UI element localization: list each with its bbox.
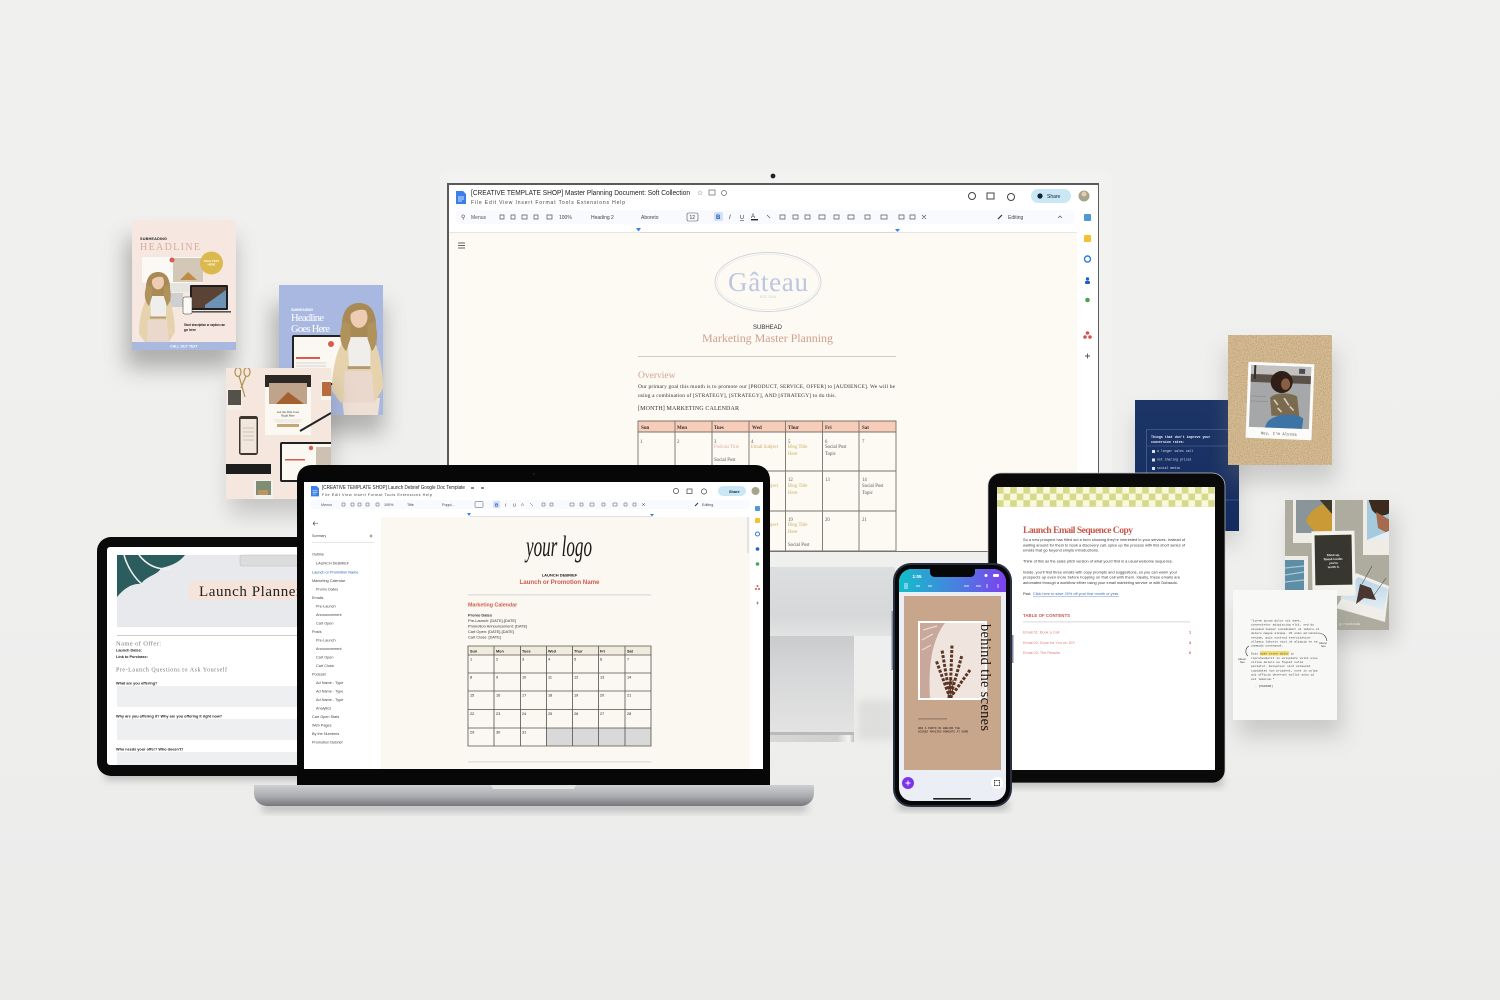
marketing calendar table: 12 <box>788 478 793 483</box>
docs toolbar: 100% <box>559 215 572 221</box>
monitor frame <box>440 172 1112 567</box>
logo: your logo: your logo <box>524 530 592 563</box>
marketing calendar table: Social Post <box>862 484 884 489</box>
outline icon <box>458 243 465 248</box>
outline sidebar: Pre-Launch <box>316 604 336 608</box>
left tablet: launch planner <box>97 537 317 780</box>
testimonial paper card: consectetur adipiscing elit, sed do <box>1251 623 1314 627</box>
email card: Right Here <box>281 414 295 418</box>
table of contents: Email 02: Done for You vs. DIY <box>1023 641 1076 645</box>
ruler <box>226 464 271 474</box>
table of contents: TABLE OF CONTENTS <box>1023 613 1070 618</box>
marketing calendar table: Wed <box>752 426 762 431</box>
docs toolbar: 12 <box>690 215 695 221</box>
docs toolbar: U <box>513 502 516 508</box>
planner questions: Why are you offering it? Why are you offering it right now? <box>116 714 223 718</box>
docs toolbar: I <box>729 215 731 221</box>
docs toolbar: A <box>521 502 524 507</box>
calendar table: 18 <box>548 694 552 698</box>
outline sidebar: Web Pages <box>312 724 332 728</box>
overview text: [MONTH] MARKETING CALENDAR <box>638 406 739 412</box>
outline sidebar: Announcement <box>316 613 342 617</box>
navy card: conversion rates: social media <box>1157 466 1180 470</box>
calendar table: 21 <box>627 694 631 698</box>
calendar table: 8 <box>470 676 472 680</box>
testimonial paper card: dolore magna aliqua. Ut enim ad minim <box>1251 631 1318 635</box>
marketing calendar table: 19 <box>788 518 793 523</box>
canvas design: behind the scenes <box>904 596 1001 770</box>
testimonial paper card: - [PERSON] <box>1255 684 1273 688</box>
ruler <box>449 228 1077 233</box>
calendar table: Fri <box>600 650 605 654</box>
logo: Gateau: Gâteau <box>728 267 808 297</box>
marketing calendar table: Sun <box>641 426 650 431</box>
outline sidebar: Ad Name - Type <box>316 698 343 702</box>
logo: Gateau <box>715 252 821 312</box>
docs toolbar: ⚲ <box>461 214 465 221</box>
outline sidebar: Announcement <box>316 647 342 651</box>
hand-drawn notes <box>1238 633 1327 664</box>
calendar table: 29 <box>470 730 474 734</box>
testimonial paper card: pariatur. Excepteur sint occaecat <box>1251 664 1311 668</box>
marketing calendar table: Topic <box>825 452 836 457</box>
calendar table: Tues <box>522 650 531 654</box>
marketing calendar table: Here <box>788 491 797 496</box>
email intro copy: emails that go beyond simple introductions. <box>1023 548 1099 552</box>
calendar table: 28 <box>627 712 631 716</box>
calendar table: 4 <box>548 658 550 662</box>
document heading <box>638 325 896 357</box>
laptop screen: launch debrief <box>304 482 763 769</box>
checker banner <box>997 487 1215 507</box>
docs toolbar: Title <box>407 503 414 507</box>
marketing calendar dates <box>468 602 527 639</box>
laptop shadow <box>262 802 807 812</box>
outline sidebar: Cart Open <box>316 622 334 626</box>
calendar table: 24 <box>522 712 526 716</box>
outline sidebar: Promo Dates <box>316 588 338 592</box>
outline sidebar: Posts <box>312 630 322 634</box>
email intro copy: Think of this as the sales pitch version of what you'd find in a usual welcome sequence. <box>1023 559 1173 563</box>
testimonial paper card: veniam, quis nostrud exercitation <box>1251 635 1311 639</box>
photo: arms up <box>1363 500 1389 555</box>
docs toolbar: U <box>740 215 744 221</box>
document heading: Marketing Master Planning <box>702 331 833 345</box>
overview text: Our primary goal this month is to promote our [PRODUCT, SERVICE, OFFER] to [AUDIENCE]. We will be <box>638 384 896 390</box>
navy card: conversion rates: conversion rates: <box>1151 440 1185 444</box>
planner questions: Name of Offer: <box>116 640 161 648</box>
app header bar: 1:05 <box>912 574 922 579</box>
add button <box>902 777 914 789</box>
email card: Get the Title Goes <box>277 410 300 414</box>
docs toolbar: B <box>716 215 721 221</box>
marketing calendar table: Email Subject <box>751 445 779 450</box>
planner questions: Launch Dates: <box>116 648 142 652</box>
hand-drawn notes: call-out <box>1238 658 1246 661</box>
testimonial paper card: cupidatat non proident, sunt in culpa <box>1251 668 1318 672</box>
marketing calendar table: 3 <box>714 440 717 445</box>
calendar table <box>468 646 651 762</box>
photo: sea <box>1285 556 1308 590</box>
calendar table: 27 <box>600 712 604 716</box>
scissors <box>235 368 250 397</box>
ruler <box>467 513 654 517</box>
marketing calendar dates: Pre-Launch: [DATE]-[DATE] <box>468 618 516 623</box>
phone <box>239 416 258 455</box>
docs toolbar: Editing <box>702 503 713 507</box>
outline sidebar: Podcast <box>312 672 327 676</box>
flyer: headline goes here: Goes Here <box>291 324 330 335</box>
document heading <box>468 572 651 595</box>
marketing calendar table: Here <box>788 452 797 457</box>
table of contents: 3 <box>1189 641 1191 645</box>
email intro copy: prospects up even more before hopping on that call with them. Ideally, these emails are <box>1023 576 1180 580</box>
marketing calendar table: 7 <box>862 440 865 445</box>
side panel icons <box>1083 214 1092 358</box>
sale seal <box>200 252 223 274</box>
outline sidebar: Outline <box>312 552 324 556</box>
canvas design: behind the scenes: HOW A PHOTO OF BEHIND THE <box>918 727 960 730</box>
marketing calendar table: Fri <box>825 426 832 431</box>
calendar table: 23 <box>496 712 500 716</box>
outline sidebar: Summary <box>312 534 326 538</box>
marketing calendar table: Podcast Title <box>714 445 739 450</box>
calendar table: 6 <box>600 658 602 662</box>
monitor stand <box>770 567 895 742</box>
calendar table: 25 <box>548 712 552 716</box>
docs toolbar: Menus <box>471 215 487 221</box>
email card <box>265 375 311 435</box>
monitor screen: master planning document <box>449 185 1098 551</box>
calendar table: 19 <box>574 694 578 698</box>
outline sidebar: Pre-Launch <box>316 638 336 642</box>
overview text: using a combination of [STRATEGY], [STRATEGY], AND [STRATEGY] to do this. <box>638 392 836 399</box>
photo: cactus <box>1293 496 1335 543</box>
polaroid: quote: worth it. <box>1327 565 1340 569</box>
marketing calendar dates: Promo Dates <box>468 612 492 618</box>
calendar table: 9 <box>496 676 498 680</box>
marketing calendar table: 1 <box>640 440 643 445</box>
calendar table: 2 <box>496 658 498 662</box>
marketing calendar table: Sat <box>862 426 869 431</box>
marketing calendar table: Mon <box>677 426 687 431</box>
marketing calendar table: Social Post <box>788 543 810 548</box>
polaroid: quote: Show up. <box>1327 553 1340 557</box>
marketing calendar table: Email Subject <box>751 523 779 528</box>
docs title bar: Share <box>729 490 740 494</box>
flyer: subheading headline: HEADLINE <box>140 242 200 253</box>
docs title bar: [CREATIVE TEMPLATE SHOP] Master Planning Document: Soft Collection <box>471 190 690 197</box>
planner header: Launch Planner <box>199 584 301 600</box>
outline sidebar: Marketing Calendar <box>312 579 346 583</box>
home bar <box>933 798 971 800</box>
document heading: SUBHEAD <box>753 325 783 331</box>
docs title bar: ☆ <box>697 189 703 197</box>
navy card: conversion rates: not sharing prices <box>1157 458 1192 462</box>
overview text <box>638 371 896 412</box>
canvas design: behind the scenes: SCENES AMAZING MOMENTS AT HOME <box>918 730 969 734</box>
marketing calendar table <box>638 421 896 551</box>
docs title bar <box>456 189 1090 206</box>
docs title bar: [CREATIVE TEMPLATE SHOP] Launch Debrief Google Doc Template <box>322 485 465 491</box>
sale seal: SALE TEXT <box>204 259 219 263</box>
email intro copy <box>1023 538 1186 596</box>
testimonial paper card: qui officia deserunt mollit anim id <box>1251 673 1314 677</box>
right tablet: email sequence <box>988 473 1225 787</box>
docs toolbar: Menus <box>321 503 332 507</box>
testimonial paper card: reprehenderit in voluptate velit esse <box>1251 656 1318 660</box>
grid button <box>991 777 1003 789</box>
cork board card with polaroid <box>1226 335 1336 482</box>
email intro copy: automated through a workflow either using your email marketing service or with Dubsado. <box>1023 581 1178 585</box>
sale seal: HERE <box>208 262 216 266</box>
polaroid: quote: Speak louder. <box>1324 557 1343 561</box>
docs toolbar <box>462 212 1062 222</box>
calendar table: 22 <box>470 712 474 716</box>
docs title bar <box>311 485 760 497</box>
polaroid: quote <box>1311 531 1356 596</box>
calendar table: Sun <box>470 650 478 654</box>
testimonial paper card: ullamco laboris nisi ut aliquip ex ea <box>1251 640 1318 644</box>
marketing calendar table: 6 <box>825 440 828 445</box>
email intro copy: waiting around for them to book a discovery call, spice up the process with this short series of <box>1023 543 1186 547</box>
calendar table: 5 <box>574 658 576 662</box>
calendar table: 31 <box>522 730 526 734</box>
marketing calendar table: 13 <box>825 478 830 483</box>
outline sidebar: Launch or Promotion Name <box>312 570 358 574</box>
calendar table: 3 <box>522 658 524 662</box>
testimonial paper card: eiusmod tempor incididunt ut labore et <box>1251 627 1320 631</box>
planner questions: What are you offering? <box>116 682 158 686</box>
marketing calendar table: 4 <box>751 440 754 445</box>
outline sidebar: Ad Name - Type <box>316 690 343 694</box>
calendar table: 15 <box>470 694 474 698</box>
calendar table: 14 <box>627 676 631 680</box>
testimonial paper card: est laborum." <box>1251 677 1275 681</box>
outline sidebar: Cart Close <box>316 664 334 668</box>
outline sidebar: Cart Open <box>316 656 334 660</box>
navy card: conversion rates: a longer sales call <box>1157 449 1193 453</box>
navy card: conversion rates: Things that don't improve your <box>1151 435 1210 439</box>
table of contents <box>1023 613 1191 655</box>
docs toolbar: 100% <box>384 503 394 507</box>
marketing calendar dates: Marketing Calendar <box>468 602 517 608</box>
planner questions <box>116 640 300 766</box>
flyer: subheading headline: CALL OUT TEXT <box>170 344 199 348</box>
calendar table: 16 <box>496 694 500 698</box>
docs title bar: File Edit View Insert Format Tools Extensions Help <box>322 493 432 497</box>
photo: woman <box>139 272 175 342</box>
docs toolbar: Poppi... <box>442 503 455 507</box>
calendar table: 10 <box>522 676 526 680</box>
docs title bar: Share <box>1047 194 1061 200</box>
docs toolbar: I <box>505 502 507 508</box>
docs toolbar: Heading 2 <box>591 215 614 221</box>
logo: Gateau: EST. 2019 <box>760 295 776 299</box>
testimonial paper card: cillum dolore eu fugiat nulla <box>1251 660 1303 664</box>
hand-drawn notes: call-out <box>1319 642 1327 645</box>
marketing calendar table: Here <box>788 530 797 535</box>
testimonial paper card: Duis aute irure dolor in <box>1251 652 1294 656</box>
marketing calendar table: Blog Title <box>788 484 807 489</box>
marketing calendar table: Blog Title <box>788 445 807 450</box>
tablet <box>280 442 331 482</box>
calendar table: 1 <box>470 658 472 662</box>
app header bar <box>899 569 1006 592</box>
flyer: subheading headline <box>126 220 236 368</box>
marketing calendar table: Email Subject <box>751 484 779 489</box>
canvas design: behind the scenes: behind the scenes <box>977 624 993 731</box>
laptop lid <box>297 465 770 785</box>
flyer: subheading headline: SUBHEADING <box>140 237 167 241</box>
marketing calendar table: Thur <box>788 426 800 431</box>
docs toolbar: B <box>495 502 499 508</box>
hand-drawn notes: here <box>1240 661 1245 664</box>
photo clipping <box>227 389 242 410</box>
table of contents: 1 <box>1189 630 1191 634</box>
marketing calendar table: Tues <box>714 426 724 431</box>
flyer: headline goes here <box>272 285 384 434</box>
docs toolbar: Aboreto <box>641 215 659 221</box>
moodboard card: @ YOURNAME <box>1339 622 1360 626</box>
pen <box>300 413 331 431</box>
smartphone <box>892 563 1014 810</box>
desktop monitor <box>440 172 1112 742</box>
calendar table: 7 <box>627 658 629 662</box>
calendar table: 20 <box>600 694 604 698</box>
photo: woman <box>332 303 383 415</box>
flyer: subheading headline: go here <box>184 328 196 332</box>
docs toolbar: Editing <box>1008 215 1024 221</box>
mockup collage <box>142 257 231 314</box>
testimonial paper card: commodo consequat. <box>1251 644 1284 648</box>
hand-drawn notes: here <box>1321 645 1326 648</box>
laptop mockup <box>292 335 342 385</box>
outline sidebar <box>312 522 374 744</box>
overview text: Overview <box>638 371 676 381</box>
outline sidebar: Promotion Debrief <box>312 740 344 744</box>
photo: dried flowers <box>920 623 985 698</box>
marketing calendar table: Social Post <box>714 458 736 463</box>
email intro copy: Click here to save 20% off your first month or year. <box>1033 592 1119 596</box>
side panel icons <box>747 506 760 604</box>
marketing calendar dates: Promotion Announcement: [DATE] <box>468 624 527 628</box>
flyer: flat lay <box>226 368 340 514</box>
marketing calendar table: 14 <box>862 478 867 483</box>
docs title bar: File Edit View Insert Format Tools Extensions Help <box>471 200 625 206</box>
docs toolbar: A <box>751 214 755 220</box>
planner questions: Link to Purchase: <box>116 655 148 659</box>
outline sidebar: Analytics <box>316 706 331 710</box>
calendar table: 11 <box>548 676 552 680</box>
laptop base <box>254 785 814 806</box>
marketing calendar dates: Cart Close: [DATE] <box>468 634 501 639</box>
testimonial paper card <box>1233 590 1342 736</box>
email intro copy: So a new prospect has filled out a form showing they're interested in your services. Instead of <box>1023 538 1186 542</box>
outline sidebar: Ad Name - Type <box>316 681 343 685</box>
planner header <box>117 555 301 636</box>
outline sidebar: Cart Open Stats <box>312 715 339 719</box>
calendar table: Mon <box>496 650 504 654</box>
calendar table: 17 <box>522 694 526 698</box>
marketing calendar table: 2 <box>677 440 680 445</box>
calendar table: Wed <box>548 650 557 654</box>
marketing calendar table: 5 <box>788 440 791 445</box>
table of contents: Email 03: The Results <box>1023 651 1060 655</box>
calendar table: 12 <box>574 676 578 680</box>
planner questions: Who needs your offer? Who doesn't? <box>116 748 184 752</box>
calendar table: 26 <box>574 712 578 716</box>
table of contents: Email 01: Book a Call <box>1023 630 1059 634</box>
marketing calendar dates: Cart Open: [DATE]-[DATE] <box>468 629 514 634</box>
planner questions: Pre-Launch Questions to Ask Yourself <box>116 666 227 674</box>
email intro copy: Inside, you'll find three emails with copy prompts and suggestions, so you can warm your <box>1023 570 1178 574</box>
polaroid: portrait <box>1246 362 1314 440</box>
navy card: conversion rates <box>1135 400 1239 544</box>
marketing calendar table: Blog Title <box>788 523 807 528</box>
marketing calendar table: Topic <box>862 491 873 496</box>
photo: swing <box>1336 566 1389 622</box>
docs toolbar <box>321 501 714 508</box>
polaroid: portrait: Hey, I'm Alyssa <box>1261 431 1297 438</box>
marketing calendar table: 21 <box>862 518 867 523</box>
small photos <box>321 380 331 400</box>
flyer: headline goes here: SUBHEADING <box>291 308 313 312</box>
marketing calendar table: 20 <box>825 518 830 523</box>
polaroid: quote: you're <box>1329 561 1338 565</box>
outline sidebar: Emails <box>312 596 323 600</box>
calendar table: Thur <box>574 650 583 654</box>
email intro copy: Psst. <box>1023 592 1031 596</box>
outline sidebar: By the Numbers <box>312 732 339 736</box>
testimonial paper card: "Lorem ipsum dolor sit amet, <box>1251 618 1302 622</box>
calendar table: 30 <box>496 730 500 734</box>
marketing calendar table: Social Post <box>825 445 847 450</box>
calendar table: 13 <box>600 676 604 680</box>
table of contents: 6 <box>1189 651 1191 655</box>
document heading: Launch or Promotion Name <box>520 579 600 586</box>
calendar table: Sat <box>627 650 634 654</box>
flyer: headline goes here: Headline <box>291 313 324 324</box>
outline sidebar: LAUNCH DEBRIEF <box>316 562 350 566</box>
laptop <box>254 465 814 812</box>
moodboard card <box>1285 496 1395 642</box>
document heading: LAUNCH DEBRIEF <box>542 572 578 578</box>
flyer: subheading headline: Short description or caption can <box>184 323 225 327</box>
email heading: Launch Email Sequence Copy <box>1023 526 1133 536</box>
